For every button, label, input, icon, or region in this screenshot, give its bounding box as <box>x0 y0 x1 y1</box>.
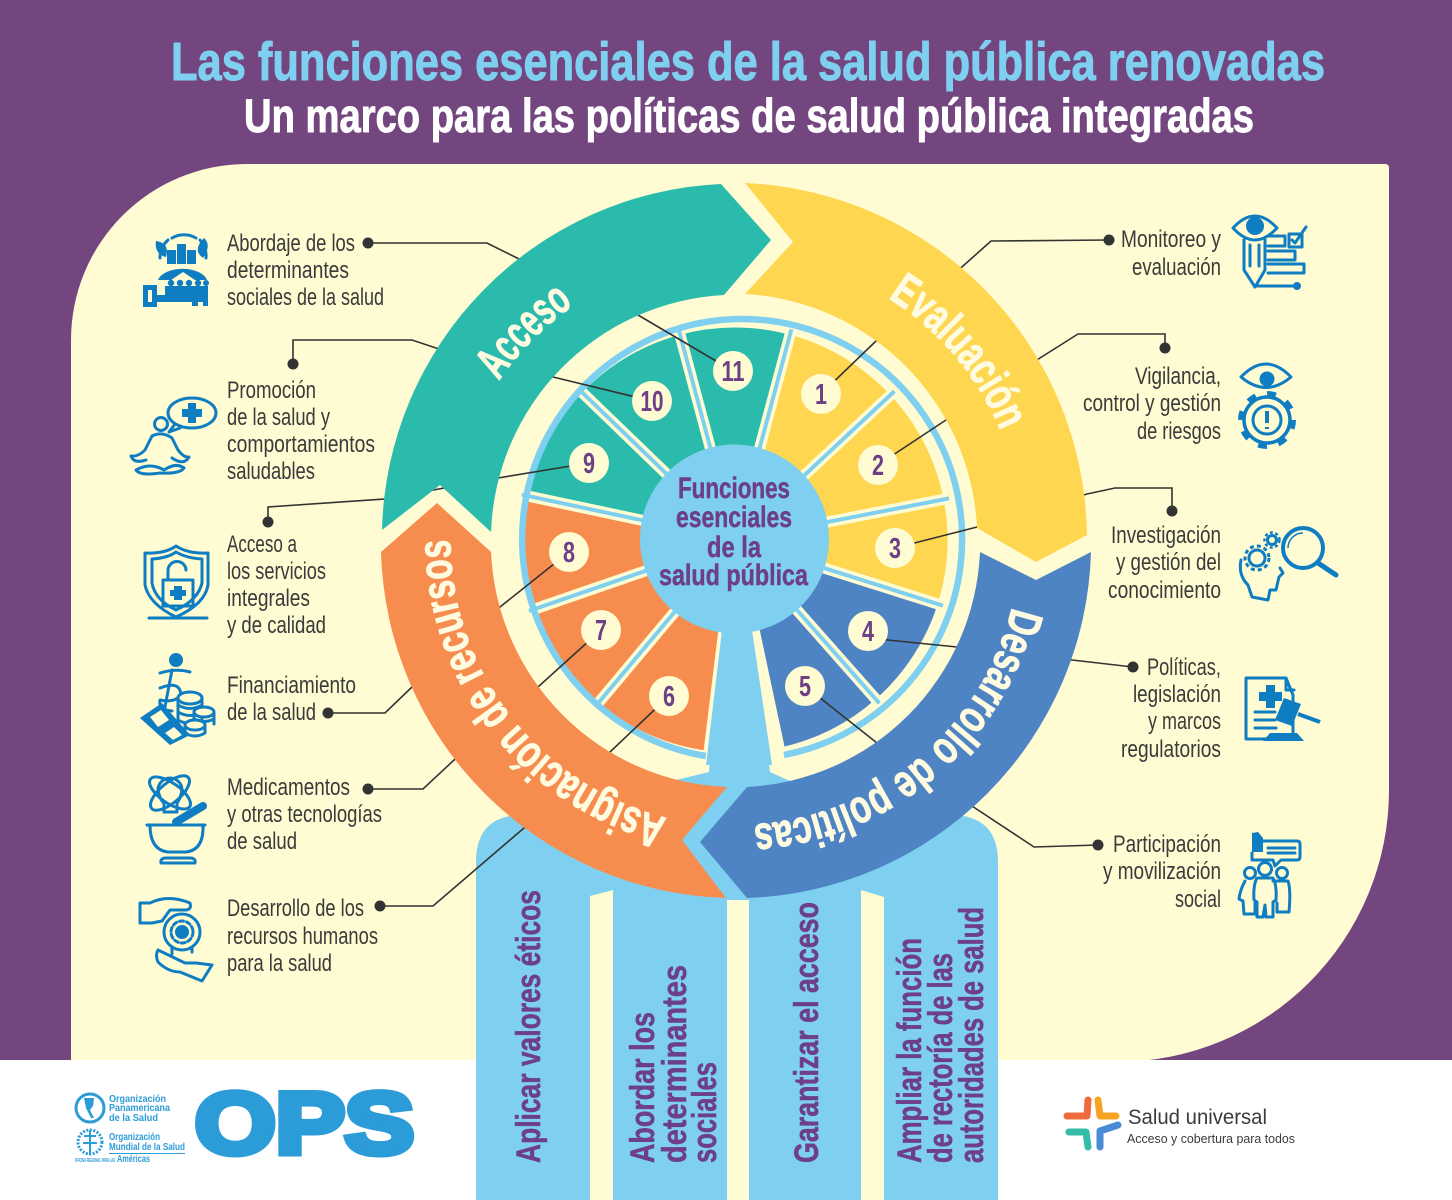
segment 11 <box>679 322 791 540</box>
label: Políticas: y marcos <box>1148 708 1221 735</box>
label: Medicamentos <box>227 774 382 855</box>
label: Políticas: legislación <box>1133 681 1221 708</box>
label: Investigación: conocimiento <box>1108 577 1221 604</box>
logo: OPS / PAHO emblems: OPS <box>195 1076 414 1172</box>
arrow label: Desarrollo de políticas: Desarrollo de políticas <box>755 608 1044 850</box>
icon: eye with pencil and chart <box>1233 216 1306 290</box>
label: Acceso a los servicios: Acceso a <box>227 531 297 558</box>
label: Promoción de la salud: comportamientos <box>227 431 375 458</box>
number badges: 7 <box>595 615 607 647</box>
icon: key with city and globe <box>143 235 209 307</box>
label: Políticas <box>1121 654 1221 763</box>
label: Acceso a los servicios: y de calidad <box>227 612 326 639</box>
number badges: 5 <box>799 671 811 703</box>
panel: cream background <box>71 164 1389 1062</box>
segment 6 <box>595 540 735 756</box>
segment 1 <box>735 329 894 540</box>
label: Abordaje de los determinantes sociales de la salud: determinantes <box>227 257 349 284</box>
label: Promoción de la salud <box>227 377 375 485</box>
icon: mortar with atom <box>145 770 205 863</box>
icon: money and coins with staff <box>140 653 214 745</box>
label: Políticas: regulatorios <box>1121 736 1221 763</box>
label: Monitoreo y evaluación <box>1121 226 1221 281</box>
hub circle <box>640 444 829 634</box>
logo: OPS / PAHO emblems: Américas <box>117 1154 150 1165</box>
number badges: 3 <box>889 533 901 565</box>
label: Desarrollo de los recursos humanos: Desarrollo de los <box>227 895 364 922</box>
number badges: 1 <box>815 379 827 411</box>
segment 3 <box>735 498 953 606</box>
arrow: Asignación de recursos <box>381 503 727 898</box>
label: Promoción de la salud: de la salud y <box>227 404 330 431</box>
segment 7 <box>529 540 735 707</box>
pillar text: Abordar los determinantes sociales: Abordar los <box>624 1012 662 1163</box>
label: Políticas: Políticas, <box>1147 654 1221 681</box>
label: Participación: social <box>1175 886 1221 913</box>
hub text: esenciales <box>676 501 792 534</box>
label: Abordaje de los determinantes sociales de la salud: sociales de la salud <box>227 284 384 311</box>
label: Financiamiento de la salud <box>227 672 356 726</box>
logo: OPS / PAHO emblems: de la Salud <box>109 1112 158 1124</box>
segment 10 <box>578 329 735 540</box>
label: Vigilancia: control y gestión <box>1083 390 1221 417</box>
label: Participación: y movilización <box>1103 858 1221 885</box>
hub text: Funciones <box>678 472 790 505</box>
pillar text: Ampliar la función de rectoría: autoridades de salud <box>953 907 991 1163</box>
label: Monitoreo y evaluación: Monitoreo y <box>1121 226 1221 253</box>
label: Desarrollo de los recursos humanos <box>227 895 378 977</box>
number badges: 10 <box>640 386 664 418</box>
logo: OPS / PAHO emblems: Organización <box>109 1093 166 1105</box>
icon: document with gavel <box>1246 678 1320 741</box>
connector lines <box>262 234 1178 912</box>
number badges: 2 <box>872 450 884 482</box>
subtitle: Un marco para las políticas de salud pública integradas <box>244 89 1254 142</box>
central wheel <box>497 302 973 900</box>
label: Participación <box>1103 831 1221 913</box>
logo: OPS / PAHO emblems <box>75 1076 414 1172</box>
label: Acceso a los servicios <box>227 531 326 639</box>
logo: OPS / PAHO emblems: Mundial de la Salud <box>109 1141 185 1153</box>
logo: OPS / PAHO emblems: OFICINA REGIONAL PARA LAS <box>75 1158 115 1164</box>
arrow label: Evaluación: Evaluación <box>889 272 1022 430</box>
label: Medicamentos: de salud <box>227 828 297 855</box>
number badges: 9 <box>583 448 595 480</box>
label: Monitoreo y evaluación: evaluación <box>1132 254 1221 281</box>
pillar text: Abordar los determinantes sociales: determinantes <box>656 965 694 1163</box>
number badges: 11 <box>722 356 744 388</box>
label: Desarrollo de los recursos humanos: recursos humanos <box>227 923 378 950</box>
pillar text: Garantizar el acceso: Garantizar el acceso <box>788 902 826 1163</box>
logo: Salud universal: Salud universal <box>1128 1106 1267 1129</box>
number badges <box>549 351 915 716</box>
icon: head with gears and magnifier <box>1240 528 1336 600</box>
logo: Salud universal <box>1067 1100 1295 1147</box>
hub text <box>659 472 808 592</box>
arrow label: Asignación de recursos: Asignación de recursos <box>424 540 667 848</box>
label: Investigación: y gestión del <box>1116 549 1221 576</box>
icon: shield with padlock <box>145 546 208 618</box>
logo: OPS / PAHO emblems: Panamericana <box>109 1102 170 1114</box>
logo: Salud universal: Acceso y cobertura para todos <box>1127 1131 1295 1146</box>
label: Investigación <box>1108 522 1221 604</box>
label: Participación: Participación <box>1113 831 1221 858</box>
panel: white footer <box>0 1060 1452 1200</box>
label: Acceso a los servicios: integrales <box>227 585 310 612</box>
label: Medicamentos: Medicamentos <box>227 774 350 801</box>
segment 4 <box>735 540 943 703</box>
number badges: 8 <box>563 537 575 569</box>
segment 9 <box>522 389 735 540</box>
label: Abordaje de los determinantes sociales de la salud <box>227 230 384 311</box>
label: Promoción de la salud: saludables <box>227 458 315 485</box>
icon: group with raised hand and speech bubble <box>1239 832 1300 917</box>
icon: hands with head and gear <box>140 898 212 981</box>
label: Promoción de la salud: Promoción <box>227 377 316 404</box>
logo: OPS / PAHO emblems: Organización <box>109 1131 160 1143</box>
label: Financiamiento de la salud: de la salud <box>227 699 316 726</box>
hub text: de la <box>707 531 761 564</box>
pillars: four light-blue columns <box>476 815 998 1200</box>
arrow: Evaluación <box>745 183 1087 562</box>
icon: eye with warning gear <box>1240 364 1294 446</box>
number badges: 6 <box>663 681 675 713</box>
pillar text: Ampliar la función de rectoría: de rectoría de las <box>922 953 960 1163</box>
label: Medicamentos: y otras tecnologías <box>227 801 382 828</box>
label: Desarrollo de los recursos humanos: para la salud <box>227 950 332 977</box>
arrow label: Acceso: Acceso <box>477 288 570 381</box>
pillar text: Abordar los determinantes sociales: sociales <box>686 1062 724 1163</box>
pillar text: Ampliar la función de rectoría: Ampliar la función <box>891 938 929 1163</box>
label: Abordaje de los determinantes sociales de la salud: Abordaje de los <box>227 230 355 257</box>
label: Vigilancia: Vigilancia, <box>1135 363 1221 390</box>
segment 8 <box>517 495 735 611</box>
label: Vigilancia: de riesgos <box>1137 418 1221 445</box>
stem connecting hub to pillars <box>668 620 810 900</box>
label: Investigación: Investigación <box>1111 522 1221 549</box>
label: Vigilancia <box>1083 363 1221 445</box>
arrow: Acceso <box>382 184 771 532</box>
label: Financiamiento de la salud: Financiamiento <box>227 672 356 699</box>
pillar text: Abordar los determinantes sociales <box>624 965 724 1163</box>
arrow: Desarrollo de políticas <box>700 552 1091 898</box>
number badges: 4 <box>862 616 874 648</box>
segment 2 <box>735 391 949 540</box>
pillar text: Aplicar valores éticos: Aplicar valores éticos <box>510 890 548 1163</box>
segment 5 <box>735 540 879 753</box>
hub text: salud pública <box>659 559 808 592</box>
pillar text: Ampliar la función de rectoría <box>891 907 991 1163</box>
label: Acceso a los servicios: los servicios <box>227 558 326 585</box>
icon: meditating person with health bubble <box>131 398 216 474</box>
